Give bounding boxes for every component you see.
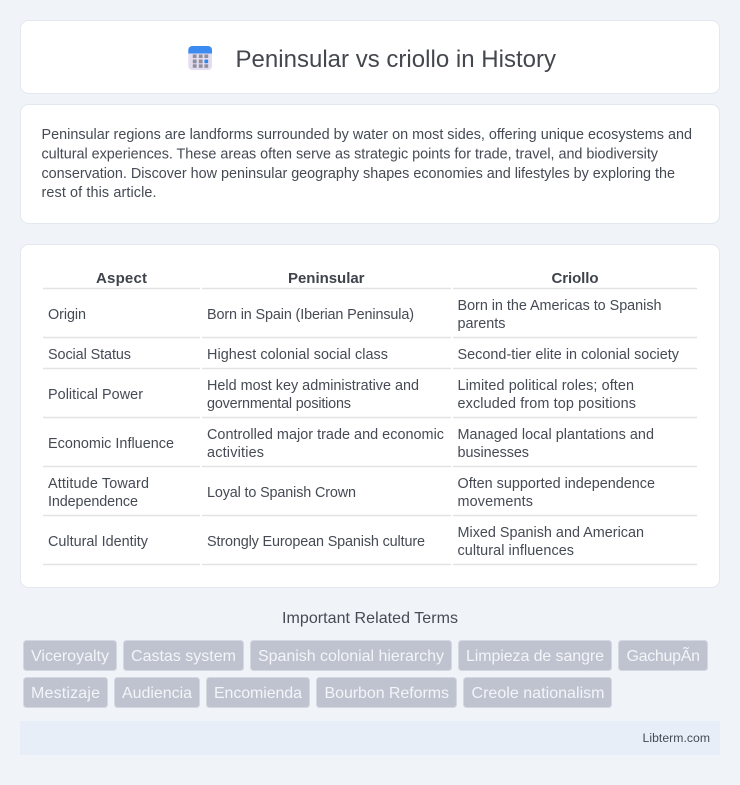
tag: Creole nationalism xyxy=(464,678,612,708)
tag: Encomienda xyxy=(206,678,310,708)
tag: Bourbon Reforms: Bourbon Reforms xyxy=(324,685,449,702)
tag: Audiencia: Audiencia xyxy=(122,685,192,702)
table row: economic influence: activities xyxy=(207,445,264,461)
tag: Castas system: Castas system xyxy=(131,648,236,665)
table row: attitude toward independence: Attitude Toward xyxy=(48,476,149,492)
tag: Encomienda: Encomienda xyxy=(214,685,302,702)
tag: Bourbon Reforms xyxy=(316,678,456,708)
table row: cultural identity xyxy=(43,525,697,564)
table row: political power: governmental positions xyxy=(207,396,351,412)
table row: political power: Political Power xyxy=(48,387,143,403)
text block: intro paragraph xyxy=(42,127,692,201)
table row: attitude toward independence: Independence xyxy=(48,494,138,510)
panel: comparison table card xyxy=(20,244,720,588)
table header: Peninsular xyxy=(288,270,365,287)
panel: intro text card xyxy=(20,104,720,224)
table row: origin: Born in the Americas to Spanish xyxy=(458,298,662,314)
tag: Mestizaje: Mestizaje xyxy=(31,685,100,702)
tag: Viceroyalty xyxy=(24,640,116,670)
table row: political power: excluded from top positions xyxy=(458,396,636,412)
table row: economic influence: Controlled major trade and economic xyxy=(207,427,444,443)
table row: attitude toward independence: movements xyxy=(458,494,533,510)
table row: economic influence: Economic Influence xyxy=(48,436,174,452)
table header xyxy=(43,270,697,288)
table row: cultural identity: Mixed Spanish and American xyxy=(458,525,644,541)
tag: Viceroyalty: Viceroyalty xyxy=(31,648,109,665)
table row: economic influence xyxy=(43,427,697,466)
table row: origin: Origin xyxy=(48,307,86,323)
table row: cultural identity: Strongly European Spanish culture xyxy=(207,534,425,550)
table row: origin: parents xyxy=(458,316,506,332)
text block: intro paragraph: rest of this article. xyxy=(42,185,156,201)
table row: attitude toward independence xyxy=(43,476,697,516)
tag: Mestizaje xyxy=(24,678,108,708)
table row: cultural identity: Cultural Identity xyxy=(48,534,149,550)
table row: cultural identity: cultural influences xyxy=(458,543,574,559)
table row: social status: Highest colonial social class xyxy=(207,347,388,363)
table row: economic influence: Managed local plantations and xyxy=(458,427,654,443)
table row: origin xyxy=(43,298,697,338)
table row: economic influence: businesses xyxy=(458,445,529,461)
table row: attitude toward independence: Loyal to Spanish Crown xyxy=(207,485,356,501)
text block: intro paragraph: Peninsular regions are landforms surrounded by water on most sides, offering unique ecosystems and xyxy=(42,127,692,143)
text block: intro paragraph: conservation. Discover how peninsular geography shapes economies and lifestyles by exploring the xyxy=(42,166,675,182)
tag: Creole nationalism: Creole nationalism xyxy=(472,685,604,702)
tag: Audiencia xyxy=(114,678,200,708)
table row: political power xyxy=(43,378,697,418)
tag: GachupÃn xyxy=(618,640,708,670)
tag: Spanish colonial hierarchy: Spanish colonial hierarchy xyxy=(258,648,444,665)
table row: attitude toward independence: Often supported independence xyxy=(458,476,655,492)
table header: Criollo xyxy=(552,270,598,287)
table row: political power: Limited political roles; often xyxy=(458,378,634,394)
tag list: related terms xyxy=(24,640,708,708)
panel: title card xyxy=(20,20,720,94)
table row: political power: Held most key administrative and xyxy=(207,378,419,394)
table row: social status xyxy=(43,347,697,368)
table row: social status: Social Status xyxy=(48,347,131,363)
footer text: Libterm.com: Libterm.com xyxy=(642,731,710,745)
table row: social status: Second-tier elite in colonial society xyxy=(458,347,680,363)
tag: Limpieza de sangre xyxy=(458,640,612,670)
title: Peninsular vs criollo in History xyxy=(236,46,556,73)
heading: important related terms: Important Related Terms xyxy=(282,610,458,627)
tag: Limpieza de sangre: Limpieza de sangre xyxy=(466,648,604,665)
table row: origin: Born in Spain (Iberian Peninsula) xyxy=(207,307,414,323)
tag: Spanish colonial hierarchy xyxy=(250,640,452,670)
tag: Castas system xyxy=(124,640,244,670)
tag: GachupÃn: GachupÃn xyxy=(626,645,700,665)
table header: Aspect xyxy=(96,270,147,287)
icon: calendar xyxy=(188,46,212,70)
text block: intro paragraph: cultural experiences. These areas often serve as strategic points for trade, travel, and biodiversity xyxy=(42,146,659,162)
footer bar xyxy=(20,721,720,755)
